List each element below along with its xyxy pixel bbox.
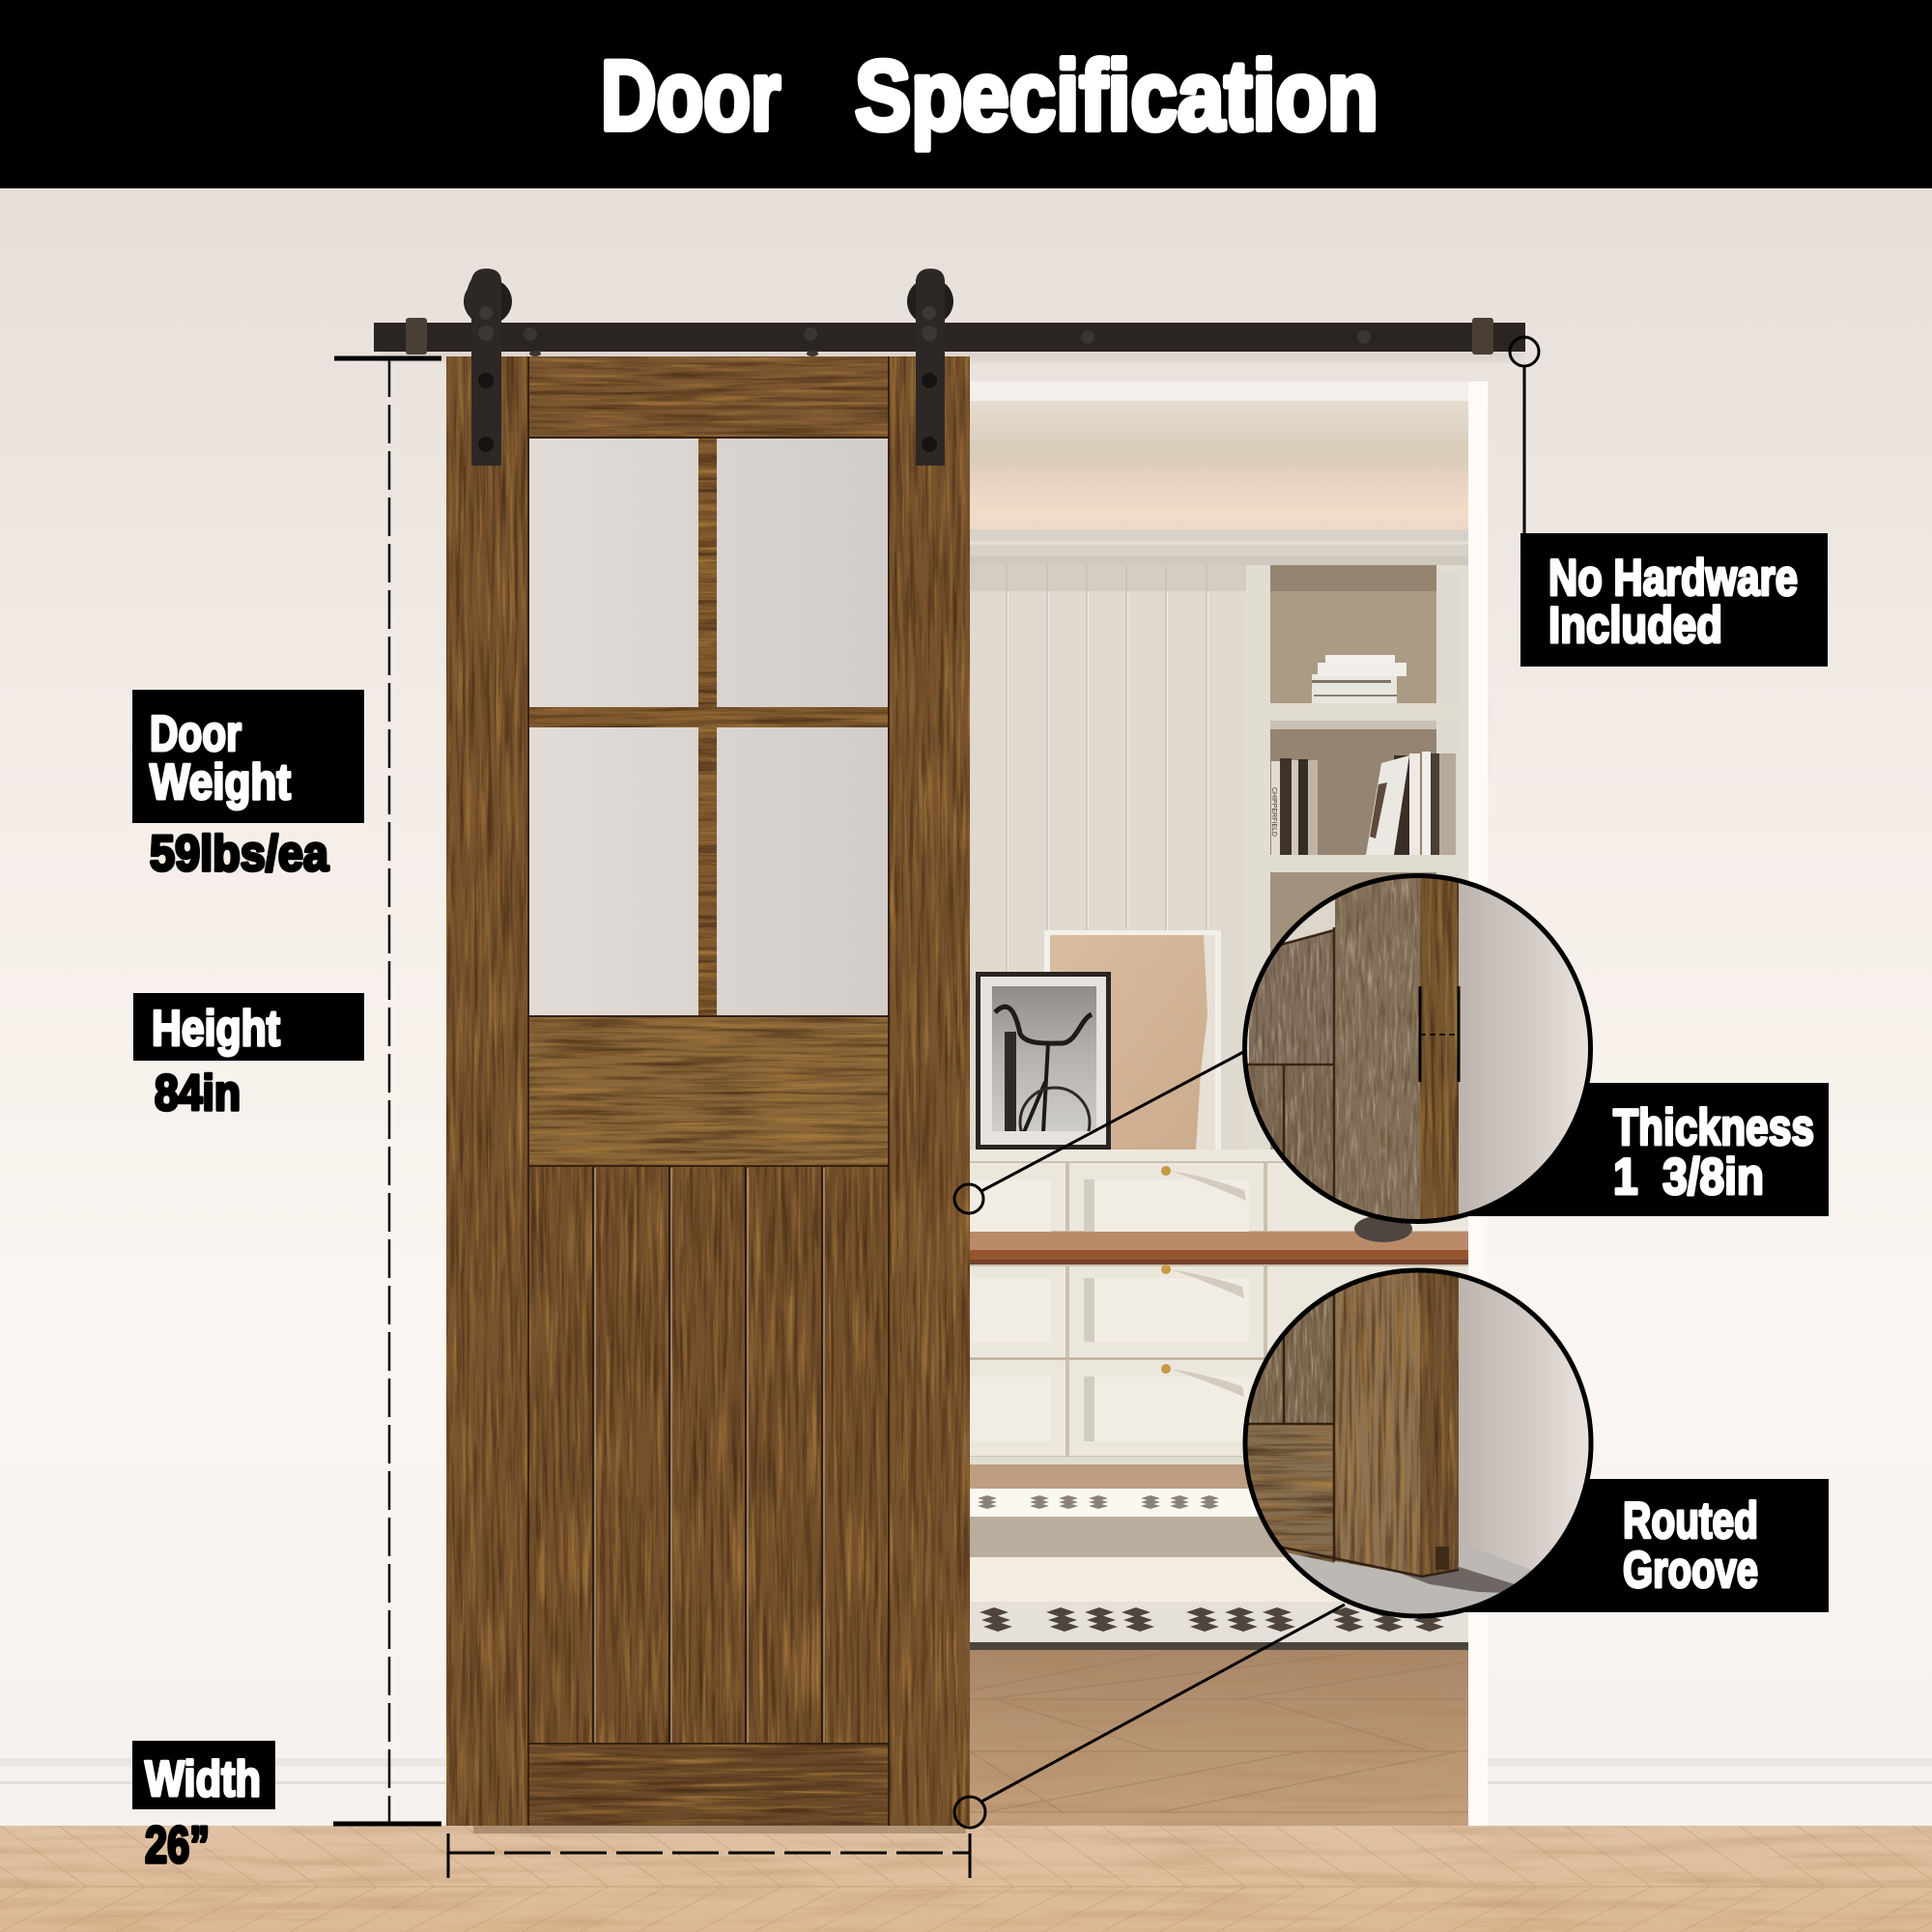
label: height: Height	[152, 1001, 280, 1057]
label: width	[132, 1741, 275, 1874]
ceiling	[970, 401, 1468, 531]
art print, tan	[1044, 930, 1221, 1151]
label: no hardware included: Included	[1548, 597, 1722, 654]
wall behind edge	[1459, 883, 1588, 1214]
stile face	[1335, 1265, 1420, 1577]
label: door weight: 59lbs/ea	[150, 826, 329, 882]
bottom rail	[528, 1744, 889, 1826]
door opening frame	[970, 382, 1488, 1826]
cabinets	[966, 1150, 1471, 1464]
left hanger	[464, 269, 512, 466]
sliding track rail	[374, 318, 1525, 356]
label: routed groove	[1449, 1479, 1829, 1612]
label: height	[133, 993, 364, 1122]
label: no hardware included: No Hardware	[1548, 550, 1798, 607]
label: door weight	[132, 690, 364, 882]
track shadow on wall	[382, 352, 1521, 359]
vertical planks	[528, 1166, 889, 1744]
baseboards	[0, 1758, 1932, 1826]
stile face	[1335, 869, 1420, 1227]
detail circle: routed groove	[1236, 1265, 1599, 1623]
rug	[970, 1489, 1468, 1650]
label: width: 26”	[145, 1816, 210, 1874]
room seen through the opening	[966, 401, 1471, 1826]
books stack	[1312, 655, 1406, 703]
panel grooves	[1248, 1294, 1459, 1578]
wooden counter	[970, 1215, 1468, 1264]
upper panel	[1249, 930, 1333, 1065]
label: no hardware included	[1520, 533, 1828, 667]
label: routed groove: Routed	[1623, 1492, 1758, 1549]
books upright right	[1366, 752, 1456, 855]
edge	[1420, 869, 1459, 1227]
label: thickness: 1 3/8in	[1613, 1149, 1764, 1206]
bicycle photo frame	[976, 972, 1111, 1157]
lock rail	[528, 1016, 889, 1166]
horizontal muntin	[528, 707, 889, 727]
title: Specification	[855, 41, 1378, 151]
floor	[0, 1826, 1932, 1932]
rug diamonds top row	[978, 1495, 1219, 1509]
books upright left: CHIPPERFIELD	[1270, 787, 1277, 837]
upper panels	[1248, 1339, 1283, 1423]
door shadow on floor	[473, 1825, 966, 1833]
label: routed groove: Groove	[1623, 1542, 1758, 1599]
thickness marks	[1420, 986, 1459, 1082]
label: door weight: Weight	[150, 754, 291, 810]
panel grooves	[1248, 927, 1335, 1198]
edge	[1420, 1265, 1459, 1577]
lower panels	[1248, 1065, 1283, 1153]
label: thickness	[1449, 1083, 1829, 1216]
books upright left	[1270, 758, 1318, 855]
far floor	[970, 1457, 1468, 1490]
right stile	[889, 356, 970, 1826]
crown moulding	[970, 529, 1468, 565]
title: Door	[601, 41, 781, 151]
groove notch	[1435, 1547, 1449, 1570]
track stops	[406, 318, 427, 355]
rug diamonds bottom row	[980, 1607, 1444, 1632]
label: thickness: Thickness	[1613, 1099, 1814, 1156]
header bar	[0, 0, 1932, 188]
track bolts	[524, 327, 1371, 356]
leader line: thickness	[954, 1050, 1247, 1213]
vertical muntin	[698, 438, 717, 1017]
barn door	[446, 356, 970, 1826]
near floor	[970, 1650, 1468, 1826]
wall behind edge	[1459, 1277, 1588, 1571]
title	[601, 41, 1378, 151]
label: height: 84in	[155, 1065, 241, 1122]
floor	[1288, 1551, 1532, 1613]
panelled wall	[970, 565, 1250, 1164]
glass panes	[528, 438, 889, 1017]
label: door weight: Door	[150, 706, 242, 762]
label: width: Width	[145, 1751, 261, 1807]
top rail	[528, 356, 889, 438]
width dimension line	[448, 1833, 970, 1878]
bookcase	[1246, 565, 1468, 1164]
lower panel	[1244, 1424, 1335, 1563]
detail circle: door edge thickness	[1236, 869, 1599, 1229]
right hanger	[907, 269, 953, 466]
left stile	[446, 356, 528, 1826]
leader line: no hardware	[1510, 337, 1539, 533]
leader line: routed groove	[954, 1605, 1345, 1828]
height dimension line	[333, 358, 441, 1826]
